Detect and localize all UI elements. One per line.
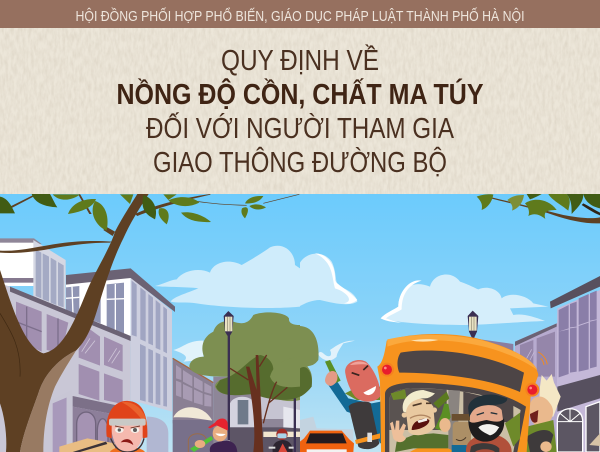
building: right purple — [473, 276, 600, 452]
tree: large foreground — [0, 194, 299, 452]
building: distant skyline — [300, 417, 353, 452]
person: cyclist in red cap with bottle — [190, 418, 237, 452]
top right tree branch — [477, 194, 600, 223]
paper background panel — [0, 0, 600, 194]
right half of scene — [300, 253, 600, 452]
person: old driver shouting — [390, 390, 451, 452]
bus: body and windshield — [377, 334, 539, 452]
person: bald man with bottle — [325, 360, 407, 443]
person: blond man on right side — [520, 352, 561, 452]
title — [116, 43, 484, 179]
car: orange — [300, 431, 354, 452]
tree leaves — [0, 194, 266, 231]
building: front with purple windows — [0, 283, 168, 452]
left half of scene — [0, 194, 300, 452]
box on scooter — [59, 438, 115, 452]
cloud: centre right — [381, 275, 548, 325]
person: back seat passenger — [452, 414, 472, 452]
building: far rear — [0, 238, 66, 310]
title: GIAO THÔNG ĐƯỜNG BỘ — [153, 145, 447, 179]
person: scooter driver with helmet — [106, 401, 147, 452]
street lamp: far — [468, 311, 478, 339]
building: middle — [66, 268, 175, 412]
tree: right portion — [300, 326, 319, 397]
cloud: centre — [155, 246, 300, 308]
illustration: street scene — [0, 194, 600, 452]
tree: street — [189, 312, 300, 452]
title: NỒNG ĐỘ CỒN, CHẤT MA TÚY — [116, 77, 484, 111]
street lamp: near — [224, 311, 234, 440]
title: QUY ĐỊNH VỀ — [221, 43, 379, 77]
building: distant behind tree — [213, 377, 300, 452]
person: distant rider — [269, 398, 296, 452]
person: bearded driver — [466, 394, 520, 452]
title: ĐỐI VỚI NGƯỜI THAM GIA — [146, 111, 455, 145]
cloud: small — [173, 341, 203, 362]
header band — [0, 0, 600, 28]
shop row with brown frames — [173, 358, 214, 452]
bag on side of bus — [349, 402, 380, 449]
smoke — [319, 341, 355, 361]
cloud: upper left — [300, 254, 357, 306]
